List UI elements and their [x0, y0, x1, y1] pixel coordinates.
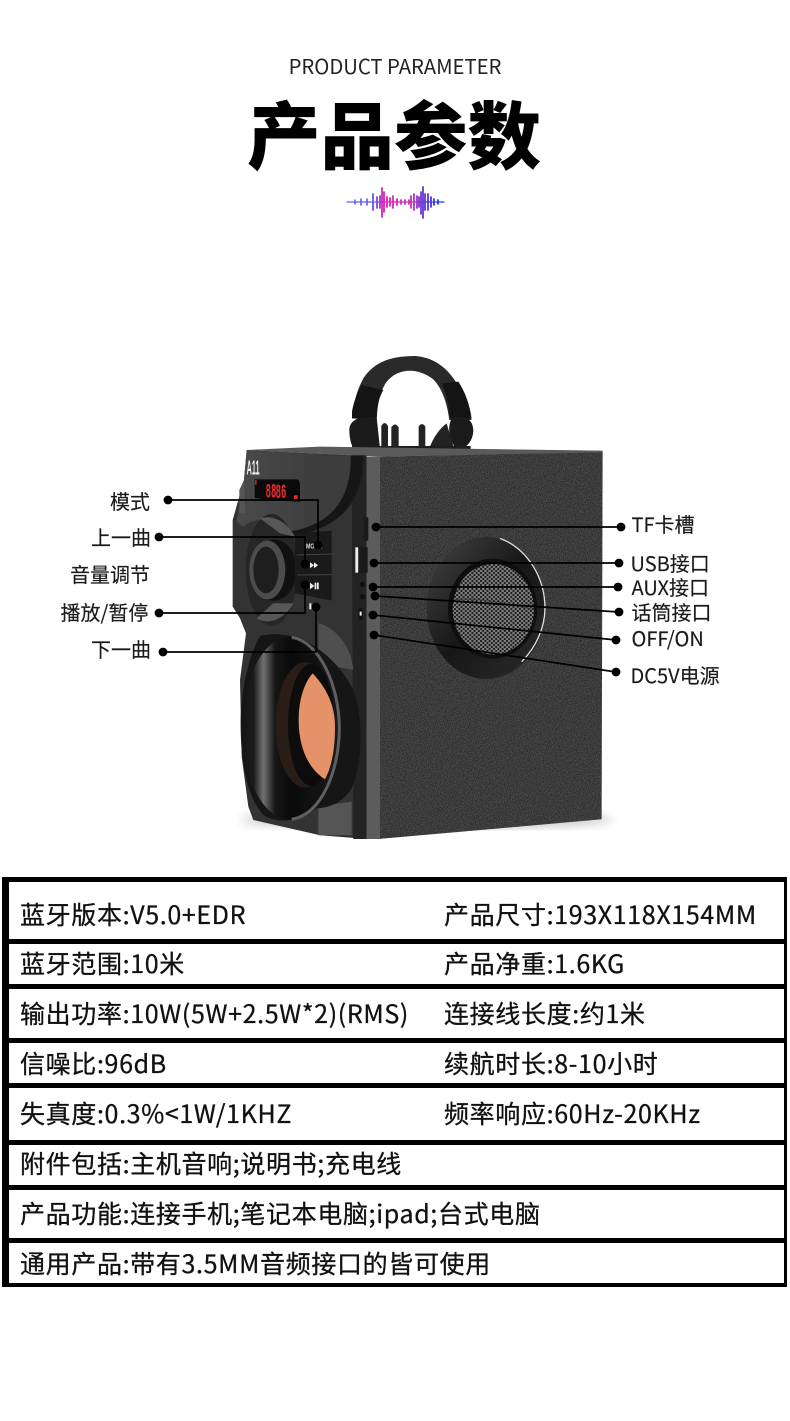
row 5: [9, 1088, 784, 1140]
display: 88: [266, 480, 276, 504]
top edge: [247, 447, 603, 457]
side speaker: [427, 537, 545, 679]
label: play pause: 播放/暂停: [60, 596, 148, 626]
label: AUX: AUX接口: [632, 572, 709, 600]
side panel with grain: [379, 452, 603, 839]
side strip: [367, 457, 379, 839]
label: DC power: DC5V电源: [630, 660, 720, 688]
leader lines and dots: [159, 500, 621, 672]
row 3: 输出功率:10W(5W+2.5W*2)(RMS): [20, 995, 409, 1031]
row 5: 频率响应:60Hz-20KHz: [444, 1095, 701, 1131]
label: microphone: 话筒接口: [632, 596, 712, 626]
button panel: [295, 531, 332, 609]
row 2: 产品净重:1.6KG: [444, 945, 625, 981]
product photo: speaker: [233, 356, 613, 839]
row 3: 连接线长度:约1米: [444, 995, 646, 1031]
waveform icon: [347, 187, 444, 218]
subtitle: PRODUCT PARAMETER: [289, 50, 501, 80]
label: previous: 上一曲: [91, 522, 151, 550]
row 5: 失真度:0.3%<1W/1KHZ: [20, 1095, 292, 1131]
row 4: 续航时长:8-10小时: [444, 1045, 658, 1081]
ports: [355, 517, 368, 638]
row 1: [9, 882, 784, 939]
top fascia: [237, 451, 351, 535]
row 3: [9, 989, 784, 1038]
display: 86: [276, 481, 286, 504]
ground shadow: [240, 811, 613, 829]
row 8: 通用产品:带有3.5MM音频接口的皆可使用: [20, 1245, 491, 1281]
label: TF slot: TF卡槽: [632, 508, 695, 538]
volume knob: [246, 514, 298, 626]
row 1: 蓝牙版本:V5.0+EDR: [20, 896, 246, 932]
row 8: [9, 1243, 784, 1283]
orange cone: [299, 673, 335, 779]
row 4: 信噪比:96dB: [20, 1045, 167, 1081]
handle: [349, 356, 473, 453]
button panel: MODE: [306, 543, 322, 551]
A11 logo: A11: [247, 457, 259, 480]
label: volume: 音量调节: [70, 558, 150, 588]
title: 产品参数: [247, 79, 541, 185]
front body: [233, 450, 367, 839]
row 2: [9, 944, 784, 984]
lower trim: [318, 623, 353, 670]
label: mode: 模式: [110, 486, 150, 514]
label: next: 下一曲: [91, 634, 151, 662]
parameter table: [2, 877, 787, 1287]
row 7: 产品功能:连接手机;笔记本电脑;ipad;台式电脑: [20, 1195, 541, 1231]
row 7: [9, 1190, 784, 1238]
display: [255, 479, 300, 504]
label: power switch: OFF/ON: [632, 622, 704, 652]
woofer horn: [241, 634, 361, 821]
row 1: 产品尺寸:193X118X154MM: [444, 896, 757, 932]
label: USB: USB接口: [630, 548, 710, 576]
row 6: 附件包括:主机音响;说明书;充电线: [20, 1145, 402, 1181]
row 6: [9, 1145, 784, 1185]
left tab: [239, 480, 245, 513]
row 2: 蓝牙范围:10米: [20, 945, 185, 981]
row 4: [9, 1043, 784, 1083]
